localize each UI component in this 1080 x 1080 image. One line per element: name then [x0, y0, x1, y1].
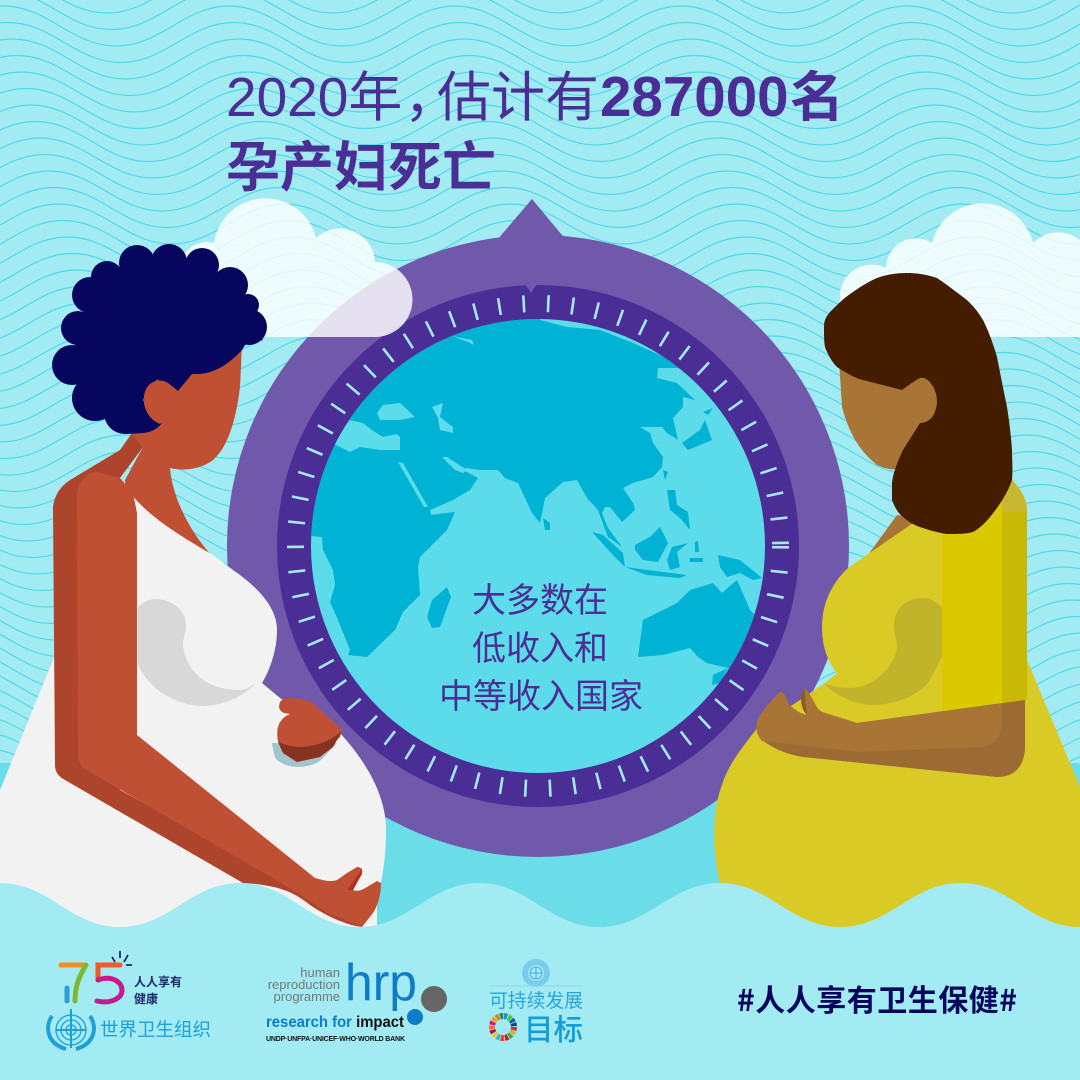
- dial pointer: [497, 199, 566, 240]
- hand shading: [278, 731, 342, 762]
- globe caption: 中等收入国家: [439, 669, 643, 718]
- lower sea band: [0, 763, 1080, 963]
- 75 numerals: [61, 965, 122, 1002]
- long hair: [824, 273, 1012, 534]
- dress shading: [138, 599, 256, 706]
- SDG wheel: [487, 1011, 519, 1043]
- woman left: [0, 244, 386, 930]
- woman right: [714, 273, 1080, 930]
- white dress: [0, 485, 386, 930]
- title: [226, 53, 844, 202]
- inland seas: [330, 336, 474, 507]
- title: ，: [404, 53, 458, 132]
- finger detail: [347, 868, 362, 890]
- title: 孕产妇死亡: [226, 123, 496, 202]
- arm highlight: [756, 689, 1002, 752]
- pointer notch: [525, 284, 537, 293]
- hand shadow on belly: [272, 743, 337, 767]
- grey dot: [421, 986, 447, 1012]
- ear: [902, 378, 937, 423]
- WHO wordmark: 世界卫生组织: [100, 1016, 211, 1042]
- WHO emblem: [48, 1009, 94, 1049]
- SDG line two: 目标: [524, 1007, 583, 1049]
- ear: [144, 381, 180, 424]
- programme name: reproduction: [268, 977, 340, 992]
- inner dark ring: [277, 285, 799, 807]
- back shoulder and arm shadow: [53, 433, 362, 927]
- globe ocean: [311, 319, 765, 773]
- title: 估计有: [437, 53, 599, 132]
- right cloud: [840, 203, 1080, 337]
- neck: [868, 515, 930, 560]
- hashtag: #人人享有卫生保健#: [737, 976, 1017, 1020]
- logo: HRP: [266, 954, 447, 1043]
- globe land: [311, 319, 762, 685]
- logo: SDG: [487, 962, 583, 1049]
- partner list: UNDP·UNFPA·UNICEF·WHO·WORLD BANK: [266, 1036, 405, 1043]
- left cloud: [142, 198, 413, 337]
- dress shoulder strip: [1002, 480, 1027, 512]
- dress centre strip: [942, 500, 1002, 712]
- title: 名: [790, 53, 844, 132]
- 75 slogan: 健康: [134, 990, 158, 1007]
- afro hair: [52, 244, 267, 434]
- title: 2020年: [226, 53, 402, 132]
- 75 slogan: [134, 973, 182, 1007]
- foreground wave: [0, 883, 1080, 1080]
- programme name: human: [300, 965, 340, 980]
- outer purple ring: [227, 235, 849, 857]
- dress shading: [823, 598, 942, 705]
- tagline: research for impact: [266, 1014, 404, 1031]
- sun rays: [112, 951, 132, 965]
- programme name: programme: [274, 989, 340, 1004]
- globe caption: 低收入和: [472, 621, 608, 670]
- blue dot: [407, 1009, 423, 1025]
- hrp wordmark: hrp: [345, 954, 417, 1012]
- logo: WHO 75: [48, 951, 211, 1049]
- UN emblem: [525, 962, 547, 984]
- finger detail: [801, 689, 807, 715]
- compass dial: [227, 199, 849, 857]
- globe caption: [439, 573, 643, 718]
- face and neck: [125, 345, 242, 560]
- globe caption: 大多数在: [472, 573, 608, 622]
- dress right strip: [1002, 512, 1027, 703]
- programme name: [268, 965, 340, 1004]
- arm shadow: [756, 689, 1025, 777]
- hand on belly: [277, 698, 342, 762]
- yellow dress: [714, 480, 1080, 930]
- 75 slogan: 人人享有: [134, 973, 182, 990]
- face: [839, 360, 925, 469]
- SDG line one: 可持续发展: [489, 986, 583, 1013]
- title: 287000: [600, 65, 789, 128]
- front arm: [77, 472, 381, 927]
- tick marks: [287, 295, 789, 797]
